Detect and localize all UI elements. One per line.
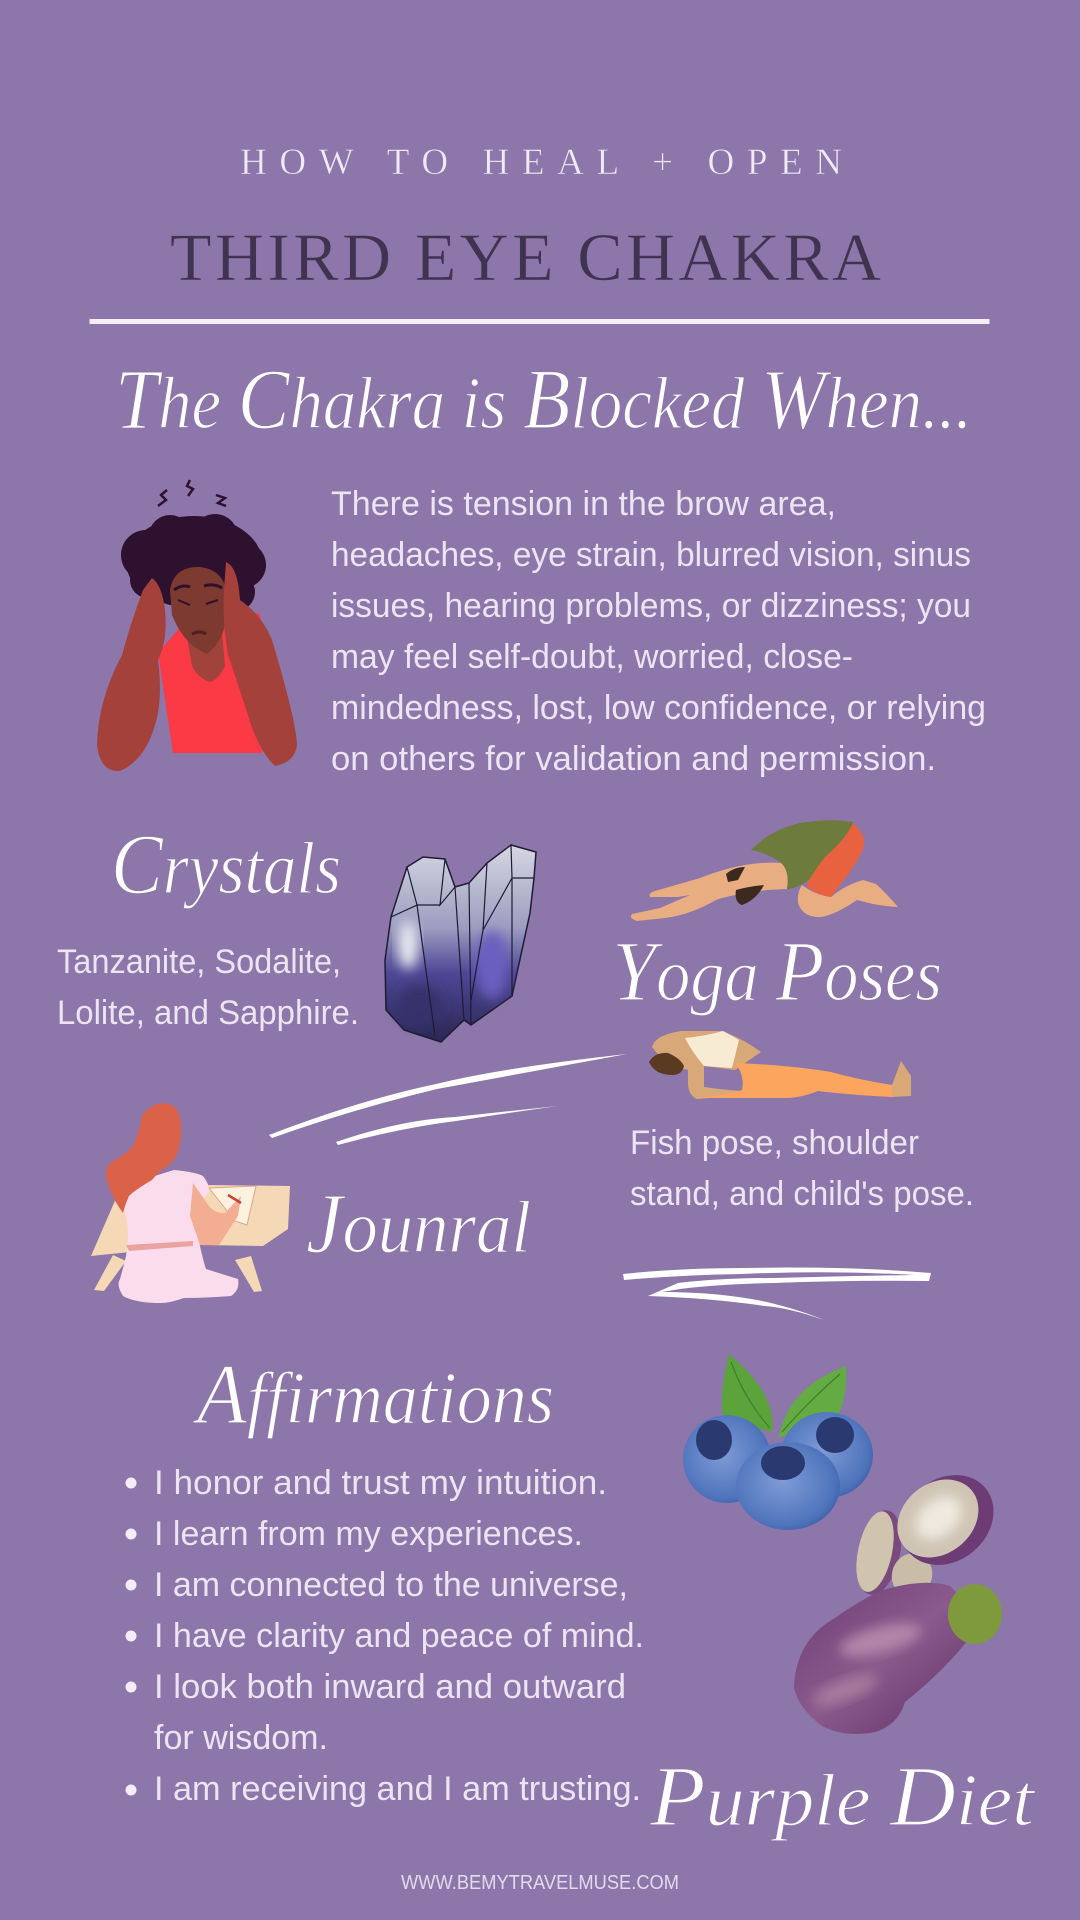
text: crystals list: Tanzanite, Sodalite, [57, 943, 341, 981]
heading: affirmations: Affirmations [192, 1346, 554, 1442]
panel: affirmations [126, 1346, 644, 1808]
icon: woman with headache [97, 480, 297, 771]
text: poses list: Fish pose, shoulder [630, 1124, 919, 1162]
text: symptoms: mindedness, lost, low confidence, or relying [331, 689, 986, 727]
text: poses list [630, 1124, 974, 1213]
icon: fish pose [649, 1031, 911, 1099]
header [90, 142, 990, 324]
list: affirmations: I learn from my experiences. [154, 1515, 583, 1553]
list: affirmations: I am connected to the universe, [154, 1566, 628, 1604]
text: symptoms [331, 485, 986, 778]
panel: journal [91, 1103, 531, 1303]
list: affirmations: I look both inward and outward [154, 1668, 626, 1706]
text: symptoms: issues, hearing problems, or dizziness; you [331, 587, 971, 625]
list: affirmations [126, 1464, 644, 1808]
list: affirmations: I am receiving and I am trusting. [154, 1770, 641, 1808]
footer url: WWW.BEMYTRAVELMUSE.COM [401, 1872, 679, 1894]
icon: purple yam [794, 1456, 1012, 1734]
divider [90, 319, 990, 324]
text: crystals list [57, 943, 359, 1032]
text: symptoms: headaches, eye strain, blurred vision, sinus [331, 536, 971, 574]
brush stroke: lower [623, 1268, 931, 1320]
icon: woman journaling [91, 1103, 290, 1303]
text: symptoms: on others for validation and permission. [331, 740, 936, 778]
text: poses list: stand, and child's pose. [630, 1175, 974, 1213]
text: crystals list: Lolite, and Sapphire. [57, 994, 359, 1032]
text: symptoms: There is tension in the brow area, [331, 485, 836, 523]
heading: purple diet: Purple Diet [649, 1748, 1037, 1844]
heading: crystals: Crystals [111, 816, 341, 912]
panel: yoga poses [612, 820, 974, 1213]
text: symptoms: may feel self-doubt, worried, close- [331, 638, 853, 676]
heading: blocked: The Chakra is Blocked When... [115, 351, 972, 447]
list: affirmations: for wisdom. [154, 1719, 328, 1757]
panel: crystals [57, 816, 536, 1042]
list: affirmations: I honor and trust my intuition. [154, 1464, 607, 1502]
list: affirmations: I have clarity and peace of mind. [154, 1617, 644, 1655]
icon: crystal [385, 845, 536, 1042]
heading: journal: Jounral [306, 1175, 531, 1271]
icon: blueberries [683, 1354, 873, 1530]
heading: yoga poses: Yoga Poses [612, 923, 942, 1019]
brush strokes: upper [269, 1054, 627, 1145]
eyebrow heading: HOW TO HEAL + OPEN [240, 142, 842, 183]
title: THIRD EYE CHAKRA [170, 219, 881, 295]
panel: chakra blocked [97, 351, 986, 778]
icon: child's pose [631, 820, 898, 921]
panel: purple diet [649, 1354, 1037, 1844]
